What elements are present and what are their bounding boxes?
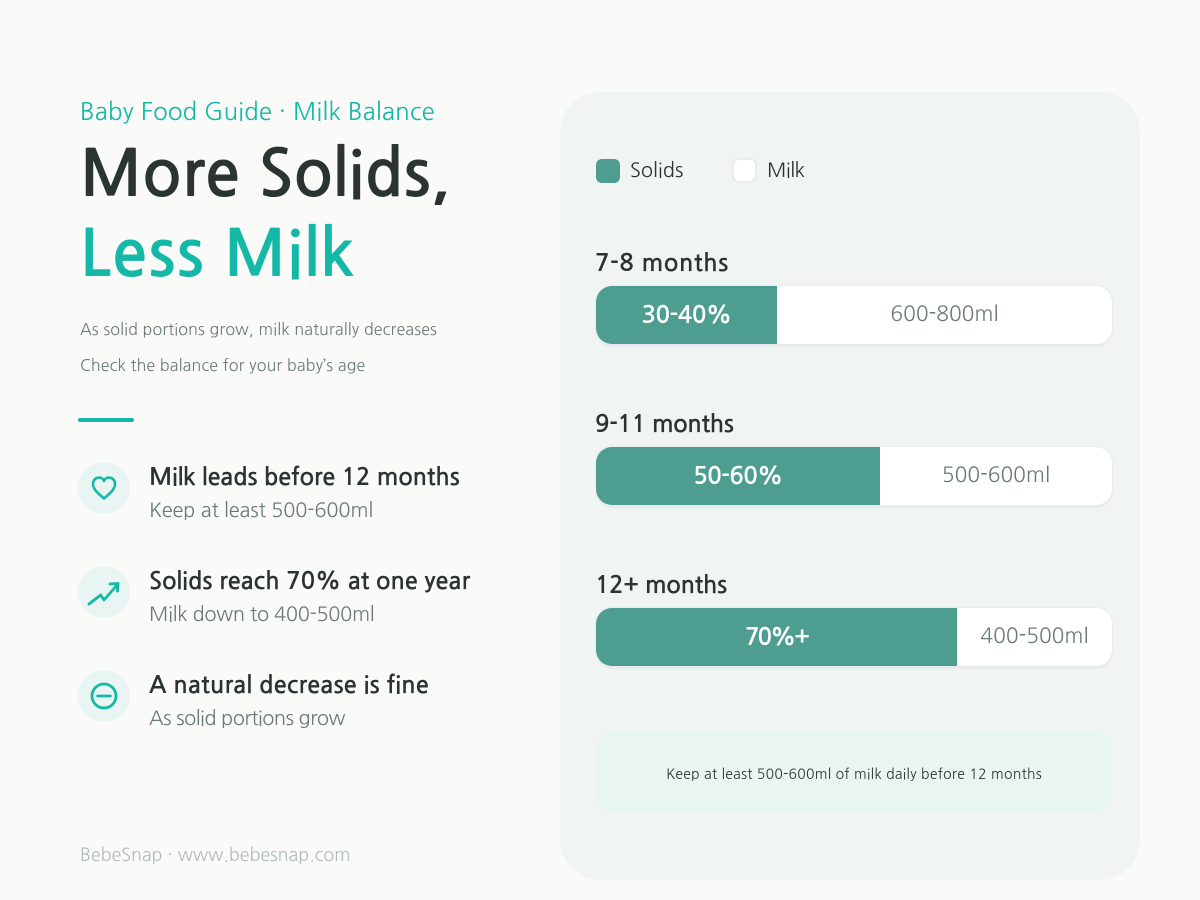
row label: 9-11 months: 9-11 months (595, 412, 733, 436)
bar: 12+ months (596, 608, 1112, 666)
feature 3 text: As solid portions grow (149, 708, 345, 728)
legend label: solids: Solids (630, 160, 683, 180)
solids segment (596, 608, 957, 666)
solids segment (596, 447, 880, 505)
footer: BebeSnap · www.bebesnap.com (80, 846, 350, 864)
icon: minus circle (78, 670, 130, 722)
title: More Solids, (80, 142, 451, 206)
icon: heart (78, 462, 130, 514)
title (80, 142, 451, 286)
row label: 7-8 months: 7-8 months (595, 251, 729, 275)
bar: 9-11 months (596, 447, 1112, 505)
accent line (78, 418, 134, 422)
milk segment: 500-600ml (942, 465, 1050, 486)
legend label: milk: Milk (767, 160, 804, 180)
legend swatch: solids (596, 159, 620, 183)
description: As solid portions grow, milk naturally decreases (80, 322, 437, 338)
feature 1 text: Keep at least 500-600ml (149, 500, 373, 520)
solids segment: 30-40% (641, 303, 732, 327)
feature 3 heading: A natural decrease is fine (149, 673, 429, 697)
solids segment (596, 286, 777, 344)
solids segment: 50-60% (693, 464, 783, 488)
row label: 12+ months: 12+ months (595, 573, 727, 597)
callout (596, 732, 1112, 812)
eyebrow: Baby Food Guide · Milk Balance (80, 100, 435, 124)
description: Check the balance for your baby’s age (80, 358, 365, 374)
description (80, 322, 437, 374)
callout: Keep at least 500-600ml of milk daily before 12 months (666, 768, 1042, 782)
icon: trend arrow (78, 566, 130, 618)
milk segment: 400-500ml (980, 626, 1089, 647)
milk segment: 600-800ml (890, 304, 999, 325)
title: Less Milk (80, 222, 355, 286)
panel: balance chart (560, 92, 1140, 880)
solids segment: 70%+ (745, 625, 808, 649)
feature 1 heading: Milk leads before 12 months (149, 465, 460, 489)
feature 2 text: Milk down to 400-500ml (149, 604, 374, 624)
feature 2 heading: Solids reach 70% at one year (149, 569, 470, 593)
bar: 7-8 months (596, 286, 1112, 344)
legend (596, 159, 804, 183)
legend swatch: milk (732, 158, 757, 183)
